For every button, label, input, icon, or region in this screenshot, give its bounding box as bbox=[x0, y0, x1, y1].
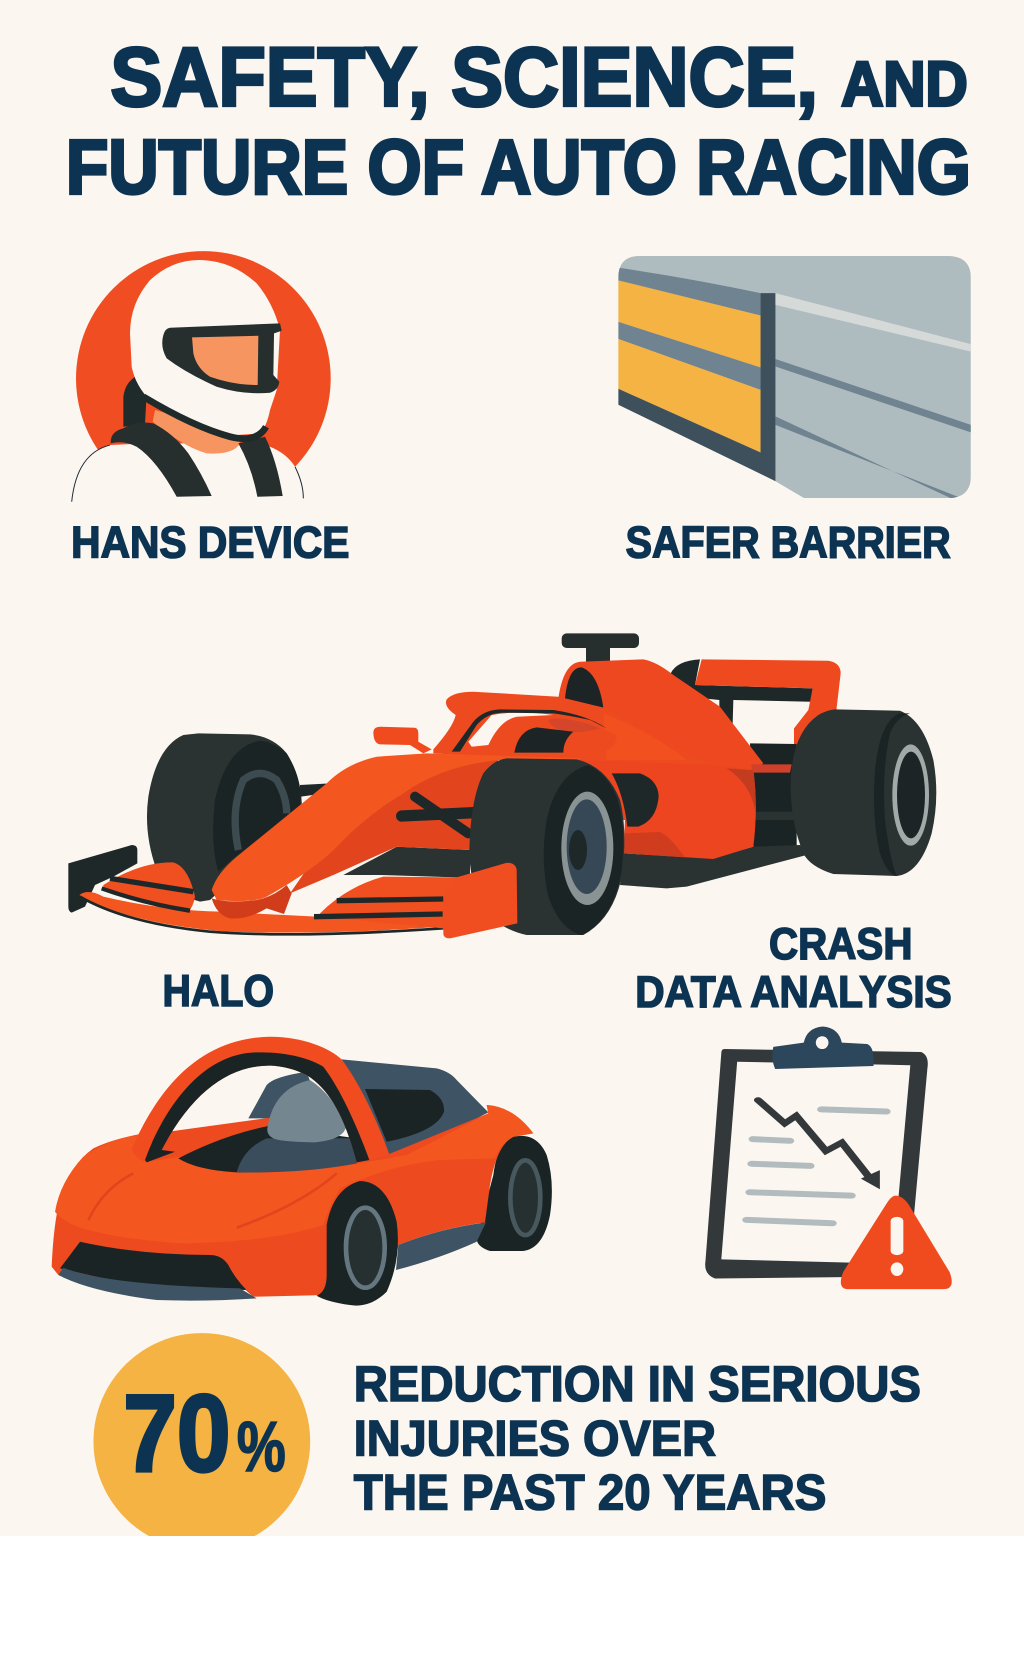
stat badge: 70%: 70 bbox=[123, 1373, 231, 1495]
stat description bbox=[354, 1356, 921, 1520]
illustration: road car with halo bbox=[52, 1037, 552, 1306]
rear wheel bbox=[477, 1136, 552, 1251]
rear roof bbox=[342, 1059, 488, 1155]
text lines bbox=[747, 1109, 886, 1223]
front wing deflector bbox=[443, 863, 517, 938]
halo arch bbox=[132, 1037, 389, 1162]
label: SAFER barrier: SAFER BARRIER bbox=[626, 519, 951, 568]
icon: clipboard with falling chart and warning bbox=[705, 1027, 952, 1289]
paper bbox=[721, 1062, 910, 1264]
body bbox=[52, 1105, 533, 1297]
stat description: INJURIES OVER bbox=[354, 1410, 716, 1466]
stat description: THE PAST 20 YEARS bbox=[354, 1464, 826, 1520]
clipboard frame bbox=[705, 1049, 928, 1278]
title: SAFETY, SCIENCE, bbox=[110, 30, 818, 124]
stat badge: 70%: % bbox=[237, 1408, 286, 1486]
clip bbox=[772, 1027, 874, 1069]
front skirt bbox=[58, 1268, 257, 1301]
headrest bbox=[248, 1072, 323, 1118]
icon: SAFER barrier bbox=[618, 256, 971, 498]
stat badge: 70% bbox=[93, 1333, 310, 1550]
side skirt bbox=[396, 1222, 486, 1270]
front wheel bbox=[317, 1181, 398, 1306]
label: HANS device: HANS DEVICE bbox=[71, 519, 349, 568]
stat description: REDUCTION IN SERIOUS bbox=[354, 1356, 921, 1412]
title bbox=[66, 30, 971, 210]
label: crash data analysis: DATA ANALYSIS bbox=[635, 968, 952, 1017]
label: halo: HALO bbox=[163, 967, 274, 1016]
grille bbox=[60, 1242, 253, 1297]
title: AND bbox=[841, 50, 968, 120]
illustration: formula car bbox=[68, 633, 936, 938]
cockpit bbox=[178, 1080, 368, 1172]
label: crash data analysis bbox=[635, 920, 952, 1017]
front section of car bbox=[68, 727, 580, 934]
warning triangle bbox=[841, 1196, 952, 1289]
icon: HANS device driver helmet bbox=[67, 251, 331, 510]
label: crash data analysis: CRASH bbox=[769, 920, 912, 969]
falling chart arrow bbox=[758, 1100, 880, 1189]
rear section of car bbox=[433, 633, 936, 888]
front right tyre bbox=[469, 758, 624, 935]
